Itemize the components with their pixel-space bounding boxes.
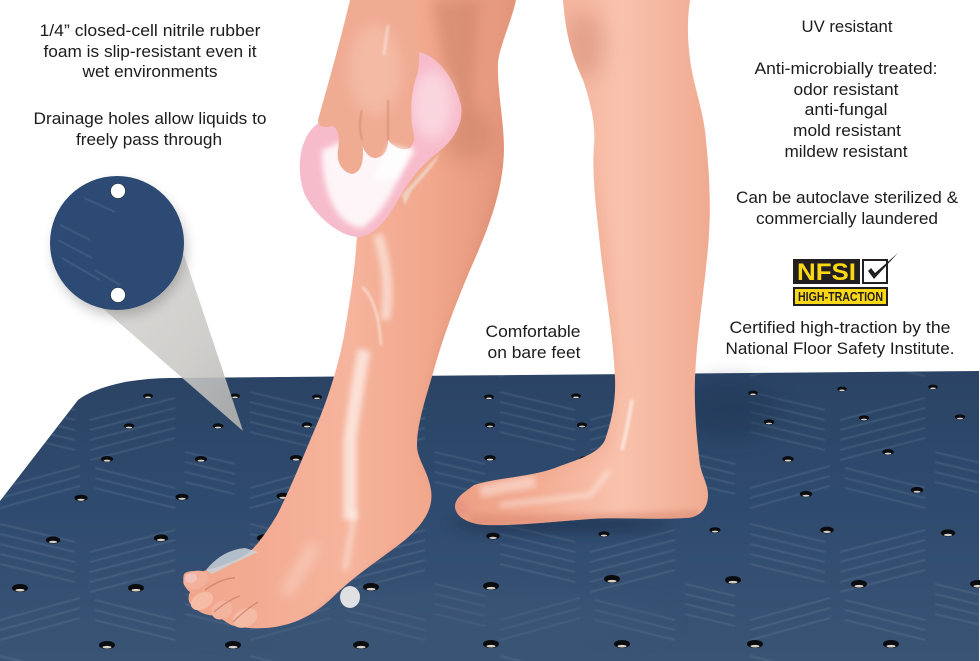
foam over fingers — [372, 145, 410, 180]
text: drainage holes: freely pass through — [76, 131, 222, 149]
NFSI high-traction logo — [793, 253, 898, 306]
text: foam material: wet environments — [81, 63, 217, 81]
text: anti-microbial list: mildew resistant — [784, 143, 908, 161]
drainage holes in mat — [12, 385, 980, 649]
text: foam material: foam is slip-resistant even it — [44, 43, 257, 61]
text: sterilized: commercially laundered — [756, 210, 938, 228]
magnified mat detail circle — [50, 176, 186, 316]
text: foam material: 1/4” closed-cell nitrile rubber — [40, 22, 261, 40]
soap bubble on mat — [340, 586, 360, 608]
left leg and raised foot — [181, 0, 520, 632]
floor mat — [0, 371, 980, 661]
text: anti-microbial list: mold resistant — [793, 122, 901, 140]
magnifier cone — [100, 255, 243, 431]
text: anti-microbial list: anti-fungal — [804, 101, 888, 119]
text: anti-microbial list: Anti-microbially treated: — [754, 60, 938, 78]
text: anti-microbial list — [754, 60, 938, 161]
text: comfortable: on bare feet — [488, 344, 581, 362]
text: comfortable — [486, 323, 581, 362]
text: foam material — [40, 22, 261, 81]
text: sterilized: Can be autoclave sterilized & — [736, 189, 958, 207]
text: certification: National Floor Safety Institute. — [726, 340, 954, 358]
right leg and foot — [451, 0, 710, 530]
text: sterilized — [736, 189, 958, 228]
NFSI high-traction logo: NFSI — [797, 259, 856, 286]
text: certification — [726, 319, 954, 358]
text: drainage holes — [34, 110, 266, 149]
soap foam at toes — [206, 548, 258, 574]
text: UV resistant: UV resistant — [802, 18, 893, 36]
NFSI high-traction logo: HIGH-TRACTION — [798, 289, 883, 304]
text: drainage holes: Drainage holes allow liquids to — [34, 110, 266, 128]
toes — [181, 568, 261, 632]
pink sponge — [300, 52, 461, 237]
text: anti-microbial list: odor resistant — [794, 81, 899, 99]
text: certification: Certified high-traction by the — [730, 319, 950, 337]
hand holding sponge — [318, 0, 419, 180]
circle holes — [110, 184, 126, 302]
text: comfortable: Comfortable — [486, 323, 580, 341]
